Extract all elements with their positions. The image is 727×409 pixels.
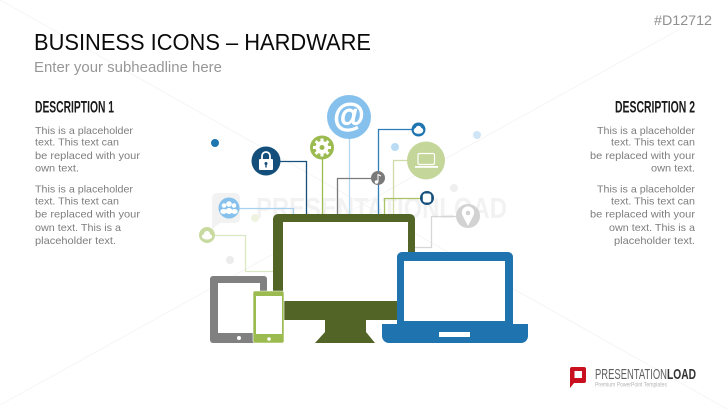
desktop monitor [273,214,415,343]
subheadline: Enter your subheadline here [34,60,222,76]
right text block: own text. This is a [609,222,695,234]
icon: music note [371,171,385,185]
icon: bag [420,191,434,205]
left text block: own text. [35,163,79,175]
icon: blue cloud [412,122,426,136]
heading: description 1: DESCRIPTION 1 [35,98,114,116]
right text block: own text. [651,163,695,175]
left text block: text. This text can [35,195,119,207]
right text block: be replaced with your [590,150,696,162]
logo mark [570,367,586,388]
icon: people group [218,198,240,218]
decorative dots [211,131,481,264]
logo tagline: Premium PowerPoint Templates [595,382,667,388]
icon: laptop circle [407,142,445,180]
logo: PresentationLoad: LOAD [667,366,696,383]
icon: gear [310,136,334,160]
icon: location pin [456,204,480,228]
product code: #D12712 [654,13,712,28]
icon: at sign [327,95,371,139]
title: BUSINESS ICONS – HARDWARE [34,29,371,55]
right text block [590,125,696,247]
left text block: own text. This is a [35,222,121,234]
right text block: be replaced with your [590,209,696,221]
smartphone [253,291,284,343]
right text block: text. This text can [611,195,695,207]
left text block: be replaced with your [35,150,141,162]
watermark: PRESENTATIONLOAD [256,193,507,225]
left text block: be replaced with your [35,209,141,221]
left text block: text. This text can [35,137,119,149]
logo: PresentationLoad [570,366,696,388]
left text block: This is a placeholder [35,184,133,196]
right text block: This is a placeholder [597,125,695,137]
icon: at sign: @ [333,97,365,133]
right text block: This is a placeholder [597,184,695,196]
left text block: This is a placeholder [35,125,133,137]
watermark [212,193,507,229]
right text block: text. This text can [611,137,695,149]
right text block: placeholder text. [614,235,695,247]
left description block [35,98,141,247]
logo wordmark: PRESENTATION [595,366,667,383]
connector lines [214,130,457,272]
right description block [590,98,696,247]
laptop [382,252,528,343]
left text block: placeholder text. [35,235,116,247]
left text block [35,125,141,247]
icon: green cloud [199,227,215,243]
tablet [210,276,267,343]
icon: padlock [252,146,280,176]
